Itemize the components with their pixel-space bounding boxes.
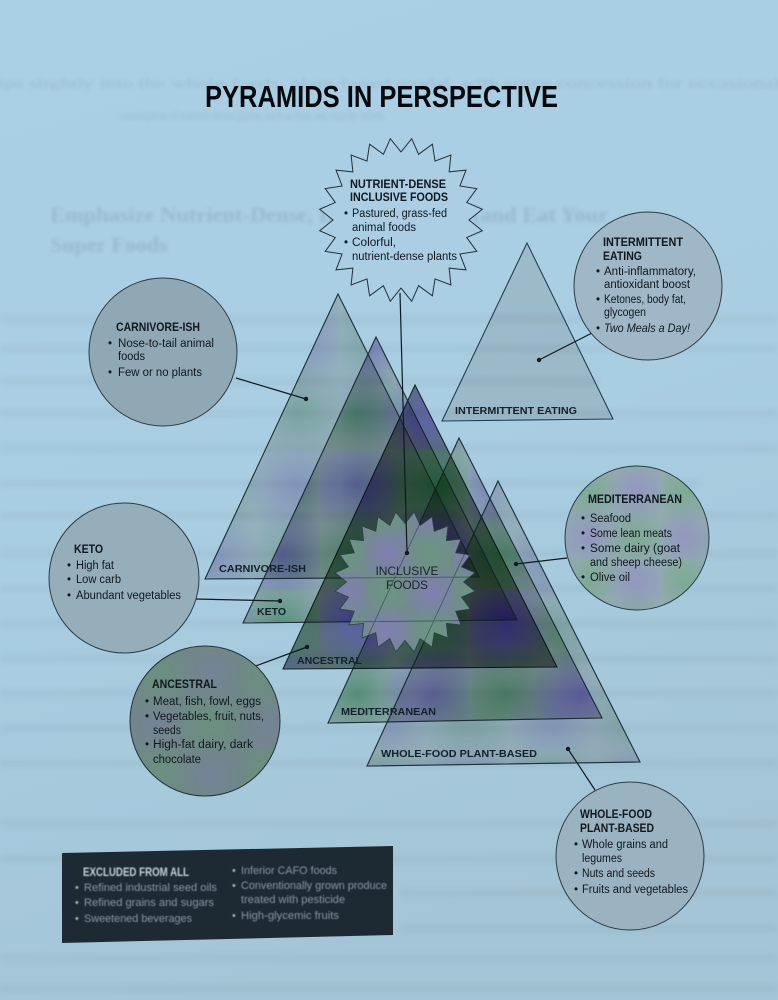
pyramid: keto — [243, 337, 517, 623]
panel: excluded from all: Inferior CAFO foods — [241, 865, 337, 877]
callout: nutrient-dense inclusive foods: NUTRIENT-DENSE — [350, 179, 446, 191]
callout: mediterranean: Some dairy (goat — [590, 543, 681, 555]
panel: excluded from all: • — [75, 897, 79, 909]
callout: keto — [49, 503, 199, 653]
panel: excluded from all: EXCLUDED FROM ALL — [83, 867, 189, 879]
callout: intermittent eating: • — [596, 294, 600, 306]
callout: intermittent eating: Ketones, body fat, — [604, 294, 686, 306]
callout: nutrient-dense inclusive foods: INCLUSIVE FOODS — [350, 192, 448, 204]
pyramid labels — [219, 563, 537, 760]
callout: mediterranean: • — [581, 513, 585, 525]
callout: mediterranean: • — [581, 572, 585, 584]
callout: keto: • — [67, 574, 71, 586]
panel: excluded from all: • — [232, 865, 236, 877]
callout: ancestral: • — [145, 711, 149, 723]
callout: carnivore-ish: • — [108, 367, 112, 379]
callout: mediterranean: Olive oil — [590, 572, 630, 584]
pyramid: carnivore-ish — [205, 294, 479, 579]
callout: ancestral: Meat, fish, fowl, eggs — [153, 696, 261, 708]
panel: excluded from all: Refined industrial seed oils — [84, 882, 217, 894]
callout: intermittent eating: EATING — [603, 251, 642, 263]
callout: keto: Low carb — [76, 574, 121, 586]
triangle edges showing through star — [205, 294, 640, 766]
callout: keto: • — [67, 560, 71, 572]
callout: nutrient-dense inclusive foods: Colorful, — [352, 237, 396, 249]
callout: mediterranean: Some lean meats — [590, 528, 672, 540]
pyramid: mediterranean — [328, 438, 602, 723]
callout: ancestral: Vegetables, fruit, nuts, — [153, 711, 264, 723]
callout: intermittent eating — [574, 212, 722, 360]
callout: nutrient-dense inclusive foods: • — [344, 237, 348, 249]
callout: carnivore-ish — [89, 278, 237, 426]
callout: whole-food plant-based: Nuts and seeds — [582, 868, 655, 880]
callout: whole-food plant-based — [556, 782, 704, 930]
callout: intermittent eating: antioxidant boost — [604, 279, 691, 291]
label: intermittent eating: INTERMITTENT EATING — [455, 405, 577, 417]
callout: ancestral: ANCESTRAL — [152, 679, 217, 691]
pyramid: ancestral — [283, 385, 557, 669]
faint body text lines — [0, 316, 778, 992]
star: inclusive foods center — [205, 294, 640, 766]
panel: excluded from all: • — [75, 882, 79, 894]
leader lines — [195, 293, 595, 790]
title: PYRAMIDS IN PERSPECTIVE — [205, 80, 558, 114]
callout: carnivore-ish: CARNIVORE-ISH — [116, 322, 200, 334]
callout: nutrient-dense inclusive foods: • — [344, 208, 348, 220]
pyramid labels: KETO — [257, 606, 286, 618]
callout: carnivore-ish: foods — [118, 351, 145, 363]
callout: intermittent eating: • — [596, 323, 600, 335]
callout: keto: • — [67, 590, 71, 602]
panel: excluded from all: Refined grains and sugars — [84, 897, 214, 909]
callout: nutrient-dense inclusive foods: Pastured, grass-fed — [352, 208, 447, 220]
panel: excluded from all — [62, 846, 393, 943]
label: inclusive foods: INCLUSIVE — [376, 564, 438, 578]
callout: whole-food plant-based: Whole grains and — [582, 839, 668, 851]
callout: ancestral: • — [145, 696, 149, 708]
panel: excluded from all: • — [75, 913, 79, 925]
show-through text from reverse page: ips slightly into the whole-foods, plant-based model, with some concession for occasional — [0, 76, 778, 92]
callout: whole-food plant-based: Fruits and vegetables — [582, 884, 688, 896]
callout: whole-food plant-based: PLANT-BASED — [580, 823, 654, 835]
panel: excluded from all: • — [232, 910, 236, 922]
callout: mediterranean: Seafood — [590, 513, 631, 525]
callout: keto: Abundant vegetables — [76, 590, 181, 602]
callout: ancestral: seeds — [153, 725, 181, 737]
callout: mediterranean — [565, 466, 709, 610]
callout: ancestral: chocolate — [153, 754, 201, 766]
show-through text from reverse page — [0, 76, 778, 257]
callout: intermittent eating: Two Meals a Day! — [604, 323, 691, 335]
callout: nutrient-dense inclusive foods: animal foods — [352, 222, 416, 234]
callout: nutrient-dense inclusive foods: nutrient-dense plants — [352, 251, 457, 263]
callout: whole-food plant-based: • — [574, 884, 578, 896]
callout: mediterranean: • — [581, 528, 585, 540]
show-through text from reverse page: consumption of nutrient-dense plants, such as fruit and starchy tubers. — [118, 108, 386, 124]
callout: carnivore-ish: Nose-to-tail animal — [118, 338, 214, 350]
callout: whole-food plant-based: • — [574, 868, 578, 880]
callout: whole-food plant-based: legumes — [582, 853, 622, 865]
callout: ancestral: High-fat dairy, dark — [153, 739, 253, 751]
panel: excluded from all: Conventionally grown produce — [241, 880, 387, 892]
panel: excluded from all: • — [232, 880, 236, 892]
callout: ancestral — [130, 646, 280, 796]
pyramid labels: ANCESTRAL — [297, 655, 363, 667]
show-through text from reverse page: Emphasize Nutrient-Dense, Inclusive Foods (and Eat Your — [50, 202, 608, 227]
callout: keto: KETO — [74, 544, 103, 556]
panel: excluded from all: Sweetened beverages — [84, 913, 192, 925]
callout: mediterranean: MEDITERRANEAN — [588, 494, 682, 506]
callout: carnivore-ish: • — [108, 338, 112, 350]
callout: whole-food plant-based: • — [574, 839, 578, 851]
panel: excluded from all: treated with pesticide — [241, 894, 345, 906]
panel: excluded from all: High-glycemic fruits — [241, 910, 340, 922]
callout: intermittent eating: Anti-inflammatory, — [604, 266, 696, 278]
pyramid: intermittent eating — [442, 243, 613, 421]
star: inclusive foods center: FOODS — [386, 578, 428, 592]
callout: intermittent eating: INTERMITTENT — [603, 237, 683, 249]
show-through text from reverse page: Super Foods — [50, 232, 168, 257]
callout: ancestral: • — [145, 739, 149, 751]
callout: whole-food plant-based: WHOLE-FOOD — [580, 809, 652, 821]
callout: mediterranean: • — [581, 543, 585, 555]
callout: intermittent eating: • — [596, 266, 600, 278]
callout: mediterranean: and sheep cheese) — [590, 557, 682, 569]
callout: nutrient-dense inclusive foods — [320, 139, 482, 301]
pyramid: whole-food plant-based — [367, 481, 640, 766]
pyramid labels: CARNIVORE-ISH — [219, 563, 306, 575]
callout: intermittent eating: glycogen — [604, 307, 646, 319]
pyramid labels: WHOLE-FOOD PLANT-BASED — [381, 748, 537, 760]
callout: keto: High fat — [76, 560, 115, 572]
pyramid labels: MEDITERRANEAN — [341, 706, 436, 718]
callout: carnivore-ish: Few or no plants — [118, 367, 202, 379]
